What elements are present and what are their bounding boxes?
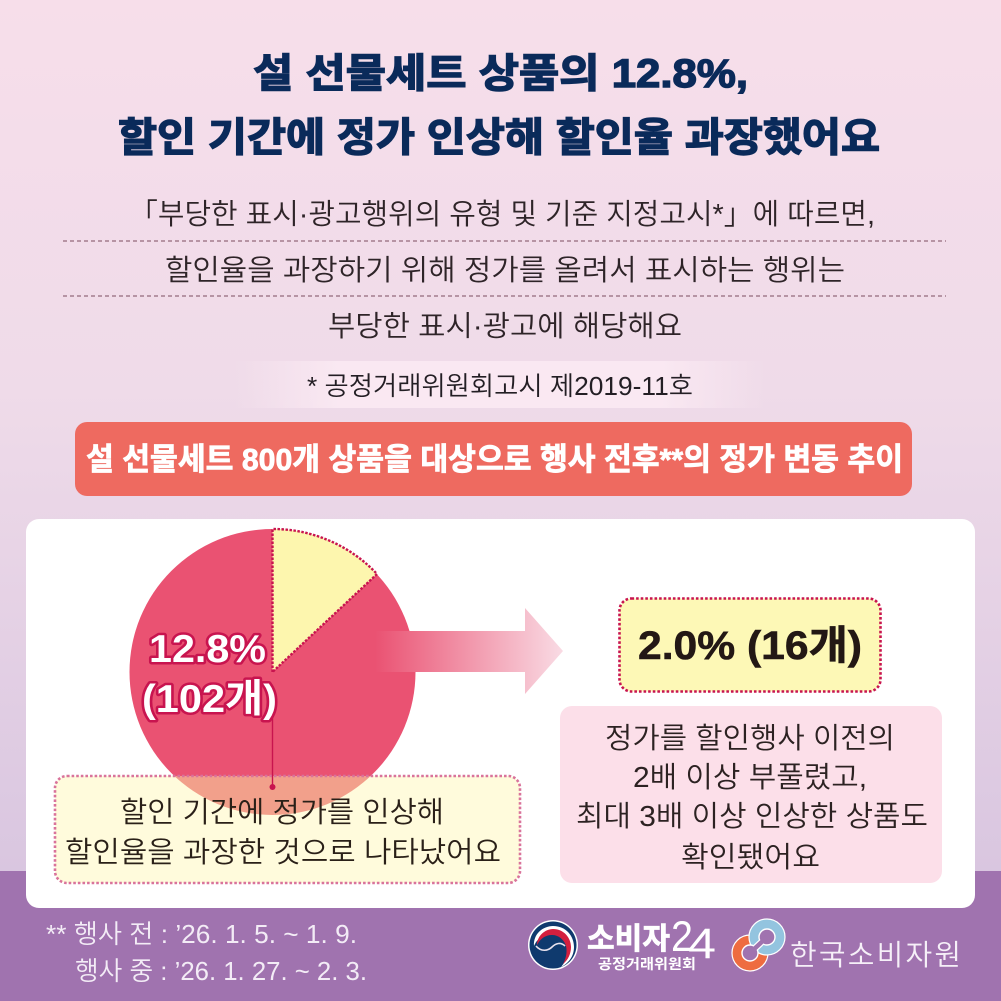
logo: 소비자24 공정거래위원회 <box>528 913 716 972</box>
pie label: 12.8% (102개): 12.8% <box>149 628 266 671</box>
description box: 확인됐어요 <box>681 842 820 874</box>
footnote: event dates <box>46 919 367 986</box>
callout: price increase during discount: 할인 기간에 정가를 인상해 <box>120 796 444 829</box>
panel: white chart card <box>26 519 975 908</box>
title: 할인 기간에 정가 인상해 할인율 과장했어요 <box>118 116 880 160</box>
logo: 소비자24 공정거래위원회: 소비자 <box>587 923 670 956</box>
section heading banner: 설 선물세트 800개 상품을 대상으로 행사 전후**의 정가 변동 추이 <box>86 442 903 477</box>
description box: 2배 이상 부풀렸고, <box>633 762 867 794</box>
result box: 2.0% (16개): 2.0% (16개) <box>638 624 862 668</box>
leader line from label to callout <box>270 717 276 790</box>
footnote: notice number <box>235 361 765 408</box>
pie chart <box>130 529 416 815</box>
result box: 2.0% (16개) <box>620 598 880 692</box>
callout: price increase during discount: 할인율을 과장한 것으로 나타났어요 <box>65 836 501 869</box>
intro text block: 할인율을 과장하기 위해 정가를 올려서 표시하는 행위는 <box>165 254 845 287</box>
description box: 정가를 할인행사 이전의 <box>605 722 895 755</box>
pie label: 12.8% (102개) <box>142 628 277 721</box>
section heading banner <box>75 422 912 496</box>
intro text block: 「부당한 표시·광고행위의 유형 및 기준 지정고시*」에 따르면, <box>129 198 875 231</box>
title <box>118 52 880 160</box>
pie label: 12.8% (102개): (102개) <box>142 678 277 721</box>
logo: 소비자24 공정거래위원회: 공정거래위원회 <box>598 956 696 972</box>
callout: price increase during discount <box>54 774 522 884</box>
description box: 최대 3배 이상 인상한 상품도 <box>576 801 928 833</box>
logo: 소비자24 공정거래위원회: 2 <box>671 913 693 961</box>
footnote: event dates: 행사 중 : ’26. 1. 27. ~ 2. 3. <box>75 956 367 986</box>
logo: 소비자24 공정거래위원회: 4 <box>688 920 716 968</box>
footnote: notice number: * 공정거래위원회고시 제2019-11호 <box>307 371 693 401</box>
logo: 한국소비자원 <box>732 919 961 972</box>
arrow <box>375 608 563 694</box>
footnote: event dates: ** 행사 전 : ’26. 1. 5. ~ 1. 9. <box>46 919 357 949</box>
title: 설 선물세트 상품의 12.8%, <box>253 52 748 96</box>
logo: 한국소비자원: 한국소비자원 <box>790 940 961 972</box>
description box <box>560 706 942 883</box>
intro text block: 부당한 표시·광고에 해당해요 <box>328 310 682 343</box>
intro text block <box>63 198 946 343</box>
